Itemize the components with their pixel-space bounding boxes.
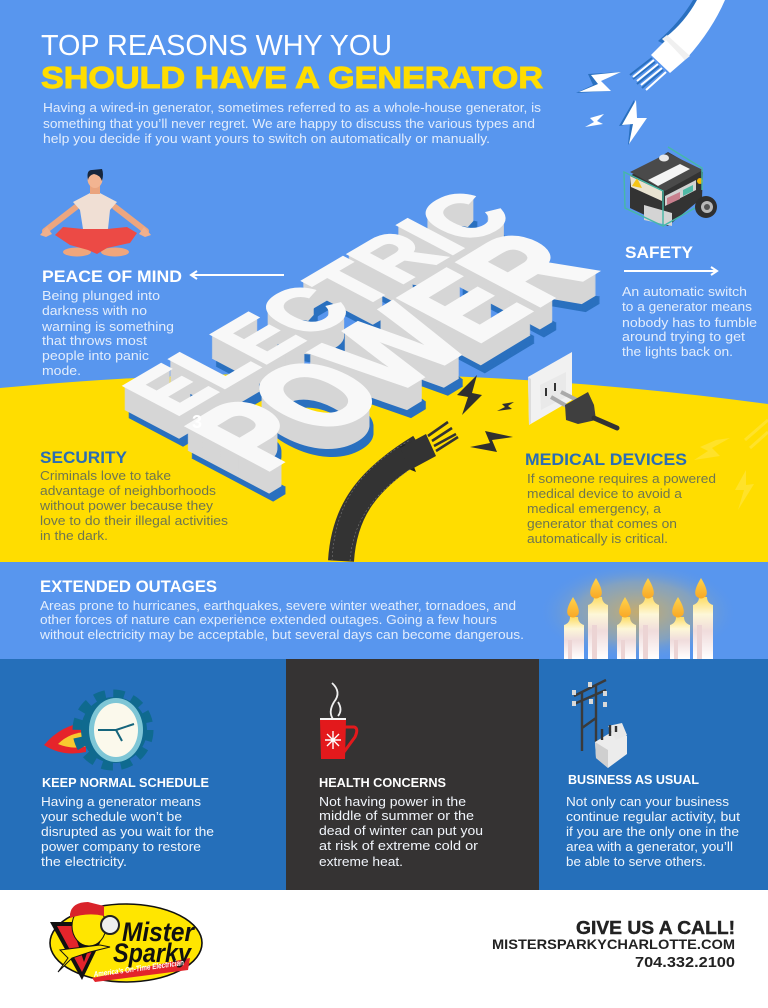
body text: dead of winter can put you — [319, 823, 483, 838]
body text: Criminals love to take — [40, 468, 171, 483]
panel: safety — [622, 243, 757, 359]
body text — [622, 284, 757, 359]
heading: SECURITY — [40, 448, 128, 467]
arrow pointing right — [624, 267, 717, 275]
icon: clock rocket — [44, 694, 149, 766]
arrow pointing left — [191, 271, 284, 279]
body text: advantage of neighborhoods — [40, 483, 217, 498]
body text: the electricity. — [41, 854, 127, 869]
contact block: MISTERSPARKYCHARLOTTE.COM — [492, 936, 735, 952]
body text: your schedule won’t be — [41, 809, 182, 824]
body text: An automatic switch — [622, 284, 747, 299]
icon: white severed cable with bolts — [576, 0, 725, 145]
intro text: help you decide if you want yours to switch on automatically or manually. — [43, 131, 490, 146]
body text: nobody has to fumble — [622, 315, 757, 330]
body text: Not only can your business — [566, 794, 730, 809]
body text: medical device to avoid a — [527, 486, 683, 501]
body text: people into panic — [42, 348, 150, 363]
body text: in the dark. — [40, 528, 108, 543]
body text: if you are the only one in the — [566, 824, 739, 839]
panel: keep normal schedule — [41, 694, 214, 869]
body text: mode. — [42, 363, 81, 378]
contact block: GIVE US A CALL! — [576, 918, 735, 938]
body text: power company to restore — [41, 839, 201, 854]
body text: disrupted as you wait for the — [41, 824, 214, 839]
heading: MEDICAL DEVICES — [525, 450, 687, 469]
panel: health concerns — [319, 683, 483, 869]
body text: at risk of extreme cold or — [319, 838, 479, 853]
icon: wall outlet and plug — [528, 352, 617, 428]
heading: EXTENDED OUTAGES — [40, 577, 217, 596]
heading: BUSINESS AS USUAL — [568, 772, 699, 787]
body text: medical emergency, a — [527, 501, 662, 516]
panel: extended outages — [39, 562, 738, 662]
intro text — [43, 100, 542, 146]
body text: automatically is critical. — [527, 531, 668, 546]
body text — [319, 794, 483, 869]
contact block: 704.332.2100 — [635, 954, 735, 971]
body text: darkness with no — [42, 303, 147, 318]
intro text: Having a wired-in generator, sometimes referred to as a whole-house generator, is — [43, 100, 542, 115]
body text — [566, 794, 740, 869]
panel: business as usual — [566, 680, 740, 869]
body text: extreme heat. — [319, 854, 403, 869]
heading: SAFETY — [625, 243, 694, 262]
3D word: ELECTRIC: ELECTRIC — [103, 179, 534, 427]
body text: without electricity may be acceptable, but several days can become dangerous. — [39, 627, 524, 642]
body text: If someone requires a powered — [527, 471, 716, 486]
logo: Mister Sparky: Sparky — [113, 938, 193, 968]
body text: that throws most — [42, 333, 147, 348]
heading: KEEP NORMAL SCHEDULE — [42, 775, 209, 790]
body text: other forces of nature can experience extended outages. Going a few hours — [40, 612, 498, 627]
body text: be able to serve others. — [566, 854, 706, 869]
intro text: something that you’ll never regret. We are happy to discuss the various types and — [43, 116, 535, 131]
body text — [41, 794, 214, 869]
icon: black lightning bolts — [457, 375, 514, 452]
stray white numeral on the P: 3 — [192, 412, 202, 432]
body text: Not having power in the — [319, 794, 466, 809]
title: TOP REASONS WHY YOU — [41, 30, 392, 62]
icon: meditating man — [40, 169, 151, 256]
contact block — [492, 918, 735, 971]
body text — [39, 468, 229, 543]
panel: peace of mind — [40, 169, 284, 378]
body text: area with a generator, you’ll — [566, 839, 733, 854]
panel: medical devices — [525, 450, 716, 546]
panel: security — [39, 448, 229, 543]
3D word: POWER: POWER — [156, 214, 624, 487]
faint bolts on yellow — [694, 420, 768, 510]
logo: Mister Sparky: America's On-Time Electrician — [92, 958, 185, 979]
body text: generator that comes on — [527, 516, 677, 531]
body text: warning is something — [41, 319, 174, 334]
body text: without power because they — [39, 498, 214, 513]
body text: Areas prone to hurricanes, earthquakes, severe winter weather, tornadoes, and — [40, 598, 516, 613]
logo: Mister Sparky: Mister — [122, 917, 195, 947]
body text — [527, 471, 716, 546]
logo: Mister Sparky — [50, 902, 202, 982]
body text: continue regular activity, but — [566, 809, 740, 824]
body text: to a generator means — [622, 299, 753, 314]
body text: around trying to get — [622, 329, 745, 344]
title: SHOULD HAVE A GENERATOR — [41, 60, 543, 95]
title — [41, 30, 543, 95]
body text — [39, 598, 524, 642]
icon: candles — [538, 562, 738, 662]
body text: middle of summer or the — [319, 808, 474, 823]
body text: Being plunged into — [42, 288, 160, 303]
body text — [41, 288, 174, 378]
body text: Having a generator means — [41, 794, 202, 809]
icon: hot mug — [320, 683, 357, 759]
icon: generator — [624, 147, 717, 226]
body text: the lights back on. — [622, 344, 733, 359]
icon: black severed cable — [332, 422, 458, 561]
body text: love to do their illegal activities — [40, 513, 229, 528]
heading: PEACE OF MIND — [42, 267, 182, 286]
icon: power poles and transformer — [572, 680, 627, 768]
heading: HEALTH CONCERNS — [319, 775, 446, 790]
